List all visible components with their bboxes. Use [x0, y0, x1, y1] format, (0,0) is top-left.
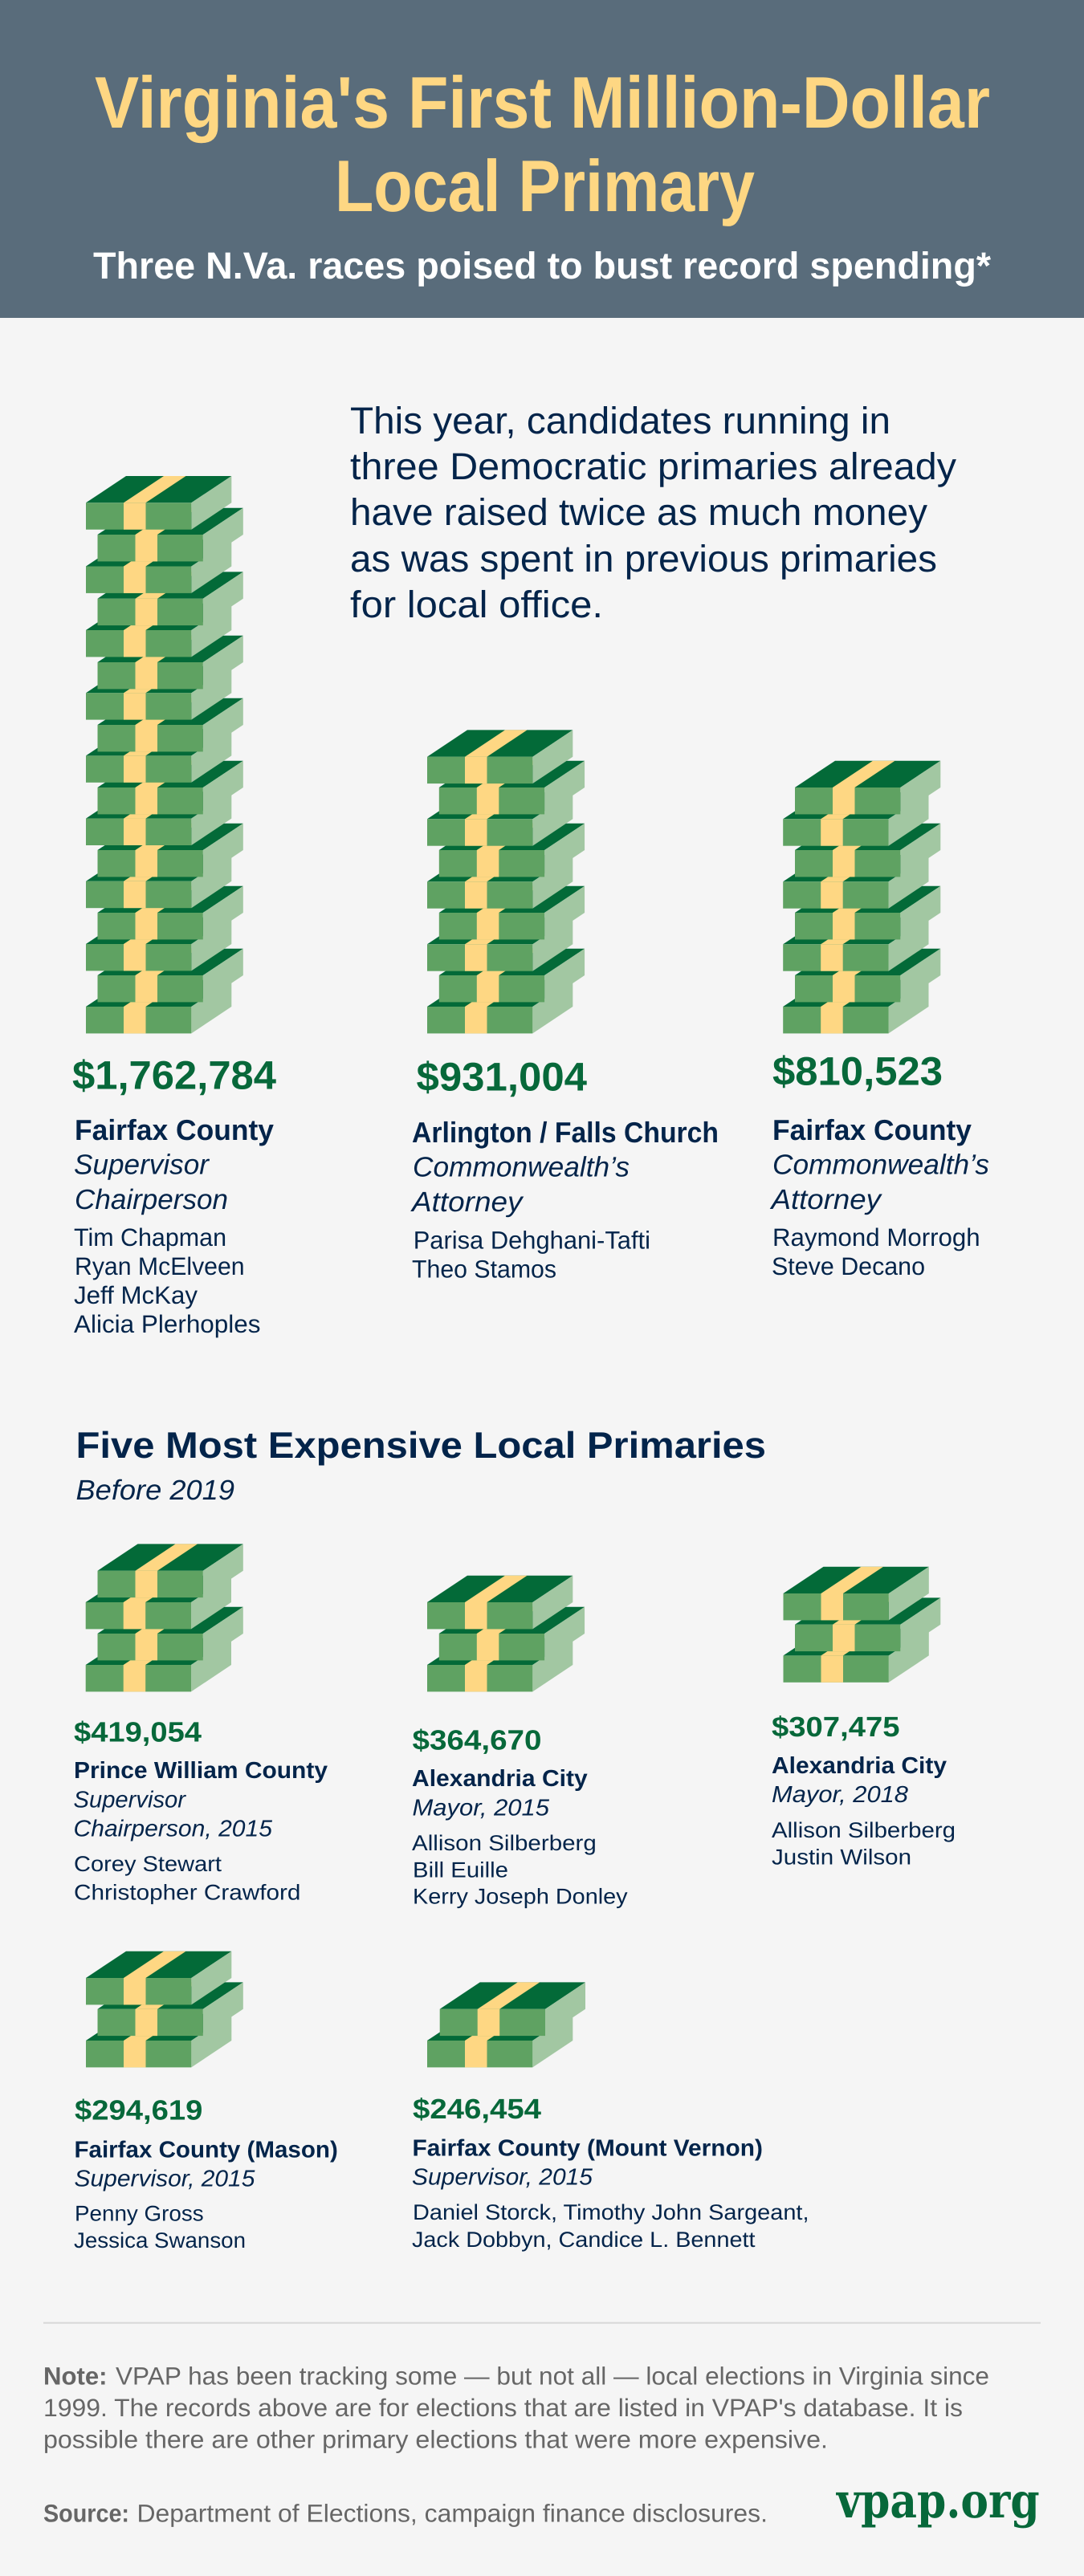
note text: 1999. The records above are for elections that are listed in VPAP's database. It is — [43, 2394, 963, 2422]
race label — [412, 1766, 588, 1821]
race label: Chairperson, 2015 — [74, 1816, 273, 1841]
candidates: Christopher Crawford — [74, 1881, 300, 1905]
race label: Prince William County — [74, 1758, 328, 1784]
source text: Department of Elections, campaign finance disclosures. — [137, 2500, 768, 2528]
note text: Note: — [43, 2362, 108, 2391]
candidates: Penny Gross — [75, 2202, 204, 2226]
race label — [74, 1113, 274, 1215]
candidates: Theo Stamos — [412, 1255, 556, 1284]
candidates: Tim Chapman — [74, 1223, 226, 1251]
race label: Chairperson — [75, 1184, 228, 1215]
intro text block: for local office. — [350, 583, 603, 625]
race label: Supervisor, 2015 — [74, 2166, 255, 2191]
candidates: Jeff McKay — [74, 1281, 198, 1309]
race label — [772, 1753, 947, 1808]
candidates: Ryan McElveen — [75, 1252, 245, 1280]
section heading: Before 2019 — [75, 1475, 234, 1506]
icon: money stack — [86, 1951, 243, 2067]
candidates: Steve Decano — [772, 1252, 925, 1280]
race label: Fairfax County — [772, 1113, 972, 1146]
panel: Fairfax County (Mount Vernon) — [412, 1982, 809, 2252]
candidates — [412, 1831, 628, 1909]
candidates: Kerry Joseph Donley — [413, 1885, 628, 1909]
panel: Fairfax County (Mason) — [74, 1951, 338, 2252]
candidates: Allison Silberberg — [772, 1818, 956, 1842]
icon: tall money stack — [86, 476, 243, 1033]
icon: money stack — [784, 1567, 940, 1683]
amount: $294,619 — [75, 2095, 202, 2126]
candidates — [74, 1223, 260, 1338]
candidates — [74, 2202, 246, 2252]
amount: $1,762,784 — [72, 1053, 276, 1098]
amount: $307,475 — [772, 1711, 899, 1743]
race label: Fairfax County — [75, 1113, 274, 1146]
icon: money stack — [86, 1544, 243, 1691]
section heading: Five Most Expensive Local Primaries — [75, 1424, 766, 1466]
race label — [74, 2137, 338, 2191]
race label: Alexandria City — [772, 1753, 947, 1779]
icon: money stack — [427, 730, 585, 1033]
candidates — [74, 1852, 300, 1905]
race label: Fairfax County (Mason) — [74, 2137, 338, 2163]
candidates — [412, 1227, 650, 1284]
race label — [410, 1116, 719, 1218]
race label — [769, 1113, 989, 1215]
panel: Prince William County — [74, 1544, 328, 1905]
title: Local Primary — [335, 146, 755, 227]
panel: header banner — [0, 0, 1084, 318]
candidates: Bill Euille — [413, 1858, 508, 1882]
candidates: Jack Dobbyn, Candice L. Bennett — [412, 2228, 756, 2252]
candidates — [772, 1818, 956, 1869]
amount: $364,670 — [413, 1724, 541, 1756]
race label: Fairfax County (Mount Vernon) — [413, 2136, 763, 2162]
amount: $419,054 — [74, 1716, 202, 1748]
candidates — [772, 1223, 980, 1280]
race label: Commonwealth’s — [413, 1152, 630, 1183]
race label: Supervisor, 2015 — [412, 2165, 593, 2191]
candidates — [412, 2200, 809, 2252]
race label: Alexandria City — [412, 1766, 588, 1792]
race label: Supervisor — [74, 1788, 186, 1813]
logo: vpap.org: vpap.org — [835, 2473, 1040, 2529]
candidates: Justin Wilson — [772, 1845, 911, 1869]
intro text block — [350, 399, 957, 625]
panel: Alexandria City 2018 — [772, 1567, 956, 1869]
note text: VPAP has been tracking some — but not all — local elections in Virginia since — [116, 2362, 989, 2391]
candidates: Corey Stewart — [74, 1852, 222, 1876]
amount: $931,004 — [416, 1054, 587, 1099]
race label — [412, 2136, 763, 2191]
candidates: Raymond Morrogh — [772, 1223, 980, 1251]
race label: Commonwealth’s — [772, 1150, 989, 1181]
intro text block: have raised twice as much money — [350, 490, 928, 533]
amount: $246,454 — [413, 2094, 542, 2125]
race label: Arlington / Falls Church — [412, 1116, 719, 1149]
race label — [74, 1758, 328, 1841]
race label: Attorney — [769, 1184, 883, 1215]
icon: money stack — [427, 1576, 585, 1691]
intro text block: This year, candidates running in — [350, 399, 890, 442]
panel: Arlington / Falls Church — [410, 730, 719, 1284]
subtitle: Three N.Va. races poised to bust record spending* — [93, 244, 992, 287]
panel: Fairfax County Supervisor Chairperson — [72, 476, 276, 1338]
race label: Mayor, 2018 — [772, 1782, 908, 1808]
candidates: Allison Silberberg — [412, 1831, 597, 1855]
candidates: Alicia Plerhoples — [74, 1310, 260, 1338]
race label: Mayor, 2015 — [413, 1796, 550, 1821]
intro text block: three Democratic primaries already — [350, 445, 957, 487]
amount: $810,523 — [772, 1049, 943, 1094]
panel: Fairfax County Commonwealth's Attorney — [769, 761, 989, 1280]
icon: money stack — [427, 1982, 585, 2067]
candidates: Parisa Dehghani-Tafti — [414, 1227, 650, 1255]
intro text block: as was spent in previous primaries — [350, 537, 937, 580]
race label: Attorney — [410, 1186, 524, 1218]
section heading — [75, 1424, 766, 1506]
title: Virginia's First Million-Dollar — [95, 63, 990, 144]
panel: Alexandria City 2015 — [412, 1576, 628, 1909]
icon: money stack — [783, 761, 940, 1033]
candidates: Daniel Storck, Timothy John Sargeant, — [413, 2200, 809, 2224]
note text — [43, 2362, 989, 2453]
candidates: Jessica Swanson — [74, 2228, 246, 2252]
title — [95, 63, 990, 227]
source text: Source: — [43, 2500, 129, 2528]
race label: Supervisor — [74, 1150, 210, 1181]
note text: possible there are other primary elections that were more expensive. — [43, 2425, 828, 2453]
